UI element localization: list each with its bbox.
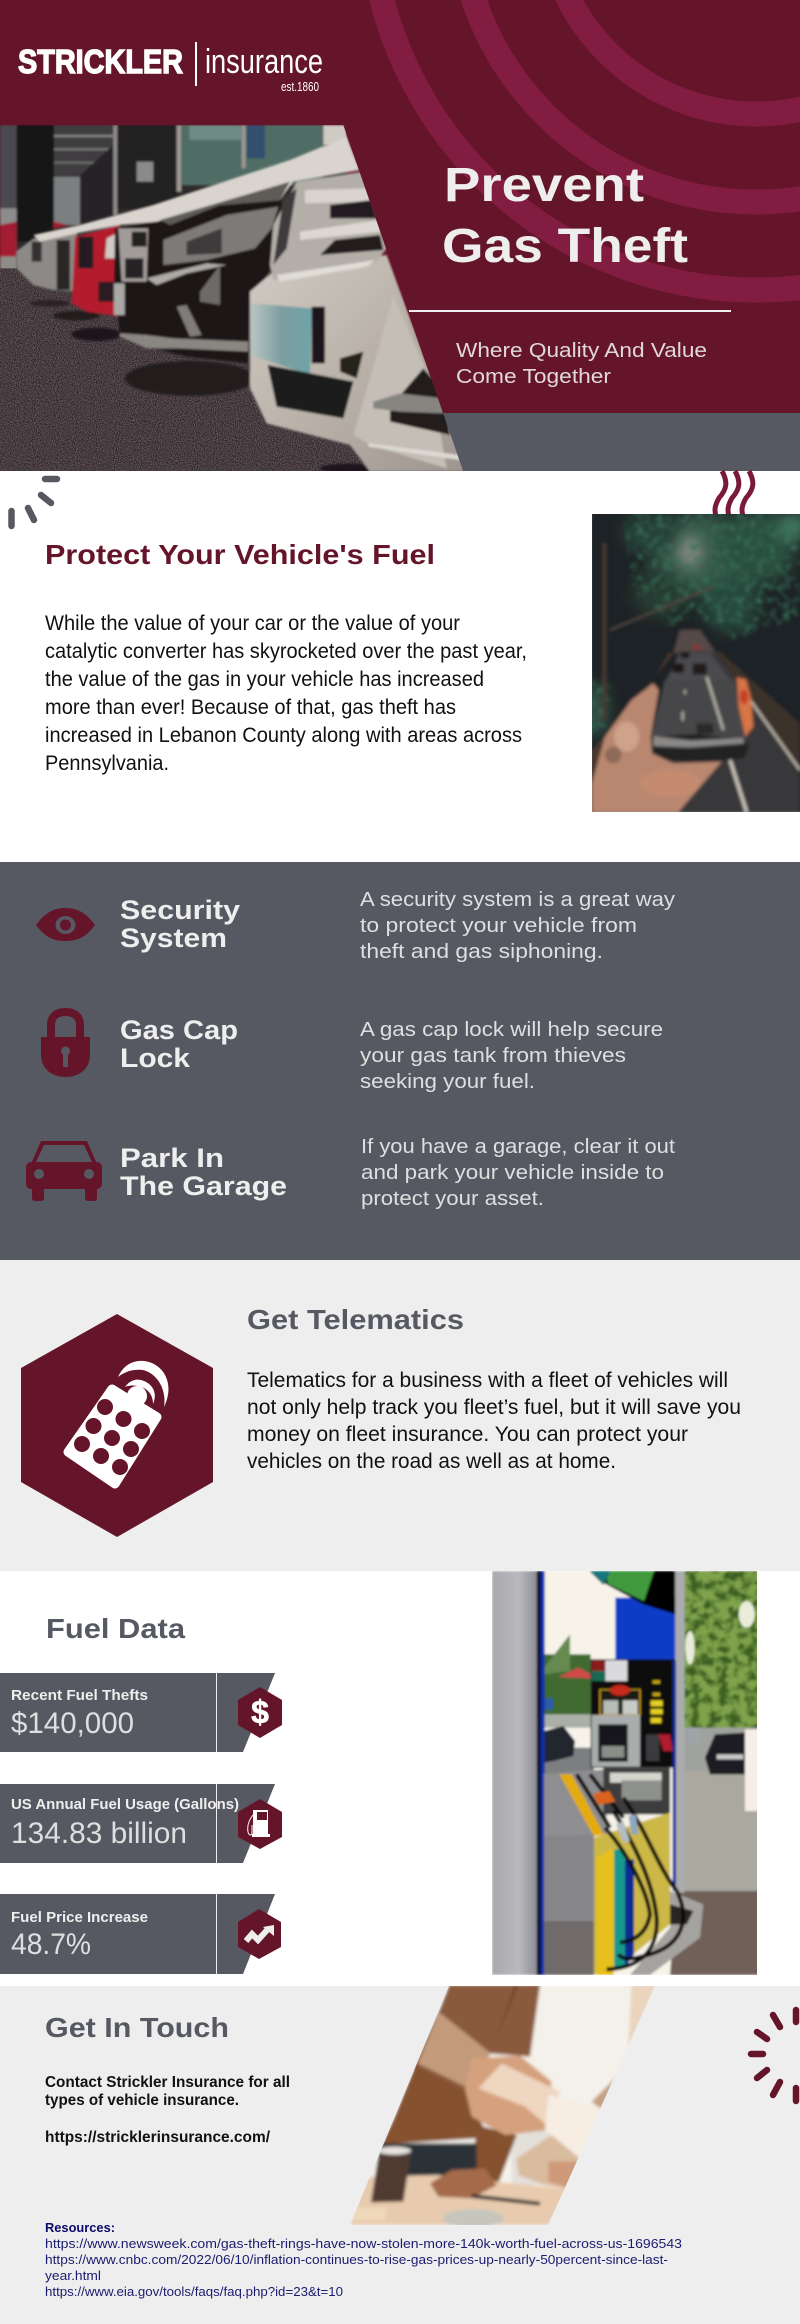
- tip text: gas cap lock: seeking your fuel.: [360, 1071, 535, 1093]
- icon: wavy lines: [715, 471, 753, 516]
- body text: intro paragraph: catalytic converter has skyrocketed over the past year,: [45, 640, 527, 663]
- tip heading: Park In The Garage: Park In: [120, 1143, 224, 1173]
- logo: Strickler Insurance: insurance: [205, 43, 323, 81]
- ground: [0, 268, 467, 472]
- body text: telematics: money on fleet insurance. You can protect your: [247, 1423, 688, 1446]
- logo: Strickler Insurance: [18, 42, 323, 94]
- tip heading: Security System: Security: [120, 895, 240, 925]
- photo: hand holding phone over forest road: [587, 510, 800, 813]
- left background: [542, 1652, 593, 1716]
- icon: rising arrow hexagon: [238, 1909, 281, 1959]
- stat: fuel price increase: 48.7%: [11, 1928, 91, 1961]
- subtitle: tagline: [456, 340, 707, 388]
- photo: gas pump: [490, 1571, 760, 1975]
- body text: telematics: [247, 1369, 741, 1473]
- tip text: park in garage: [361, 1136, 675, 1210]
- resources list: https://www.eia.gov/tools/faqs/faq.php?id=23&t=10: [45, 2284, 343, 2299]
- photo: business handshake: [345, 1985, 662, 2228]
- tip heading: Gas Cap Lock: Gas Cap: [120, 1015, 238, 1045]
- body text: telematics: vehicles on the road as well as at home.: [247, 1450, 616, 1473]
- body text: telematics: not only help track you fleet’s fuel, but it will save you: [247, 1396, 741, 1419]
- rails: [592, 653, 673, 787]
- white car: [250, 255, 467, 472]
- tip text: park in garage: and park your vehicle inside to: [361, 1162, 664, 1184]
- subtitle: tagline: Where Quality And Value: [456, 340, 707, 362]
- logo: Strickler Insurance: est.1860: [281, 79, 319, 94]
- resources list: [45, 2220, 682, 2299]
- title divider: [409, 310, 731, 312]
- contact text: Contact Strickler Insurance for all: [45, 2074, 290, 2091]
- title: Prevent Gas Theft: Prevent: [444, 159, 644, 212]
- tip text: park in garage: If you have a garage, clear it out: [361, 1136, 675, 1158]
- title: Prevent Gas Theft: Gas Theft: [442, 220, 688, 273]
- logo: Strickler Insurance: STRICKLER: [18, 43, 183, 80]
- road: [673, 652, 800, 812]
- resources list: https://www.newsweek.com/gas-theft-rings-have-now-stolen-more-140k-worth-fuel-across-us-1696543: [45, 2236, 682, 2251]
- grey band under title: [430, 413, 800, 471]
- tip heading: Security System: [120, 895, 240, 953]
- black car: [114, 200, 282, 363]
- icon: padlock: [41, 1012, 90, 1077]
- panel: get telematics: [0, 1260, 800, 1571]
- tip text: gas cap lock: A gas cap lock will help secure: [360, 1019, 663, 1041]
- pillars: [675, 1571, 685, 1893]
- decorative concentric rings: [370, 0, 800, 290]
- icon: grey spinner dashes: [12, 479, 57, 526]
- tip heading: Park In The Garage: [120, 1143, 287, 1201]
- tip text: security system: [360, 889, 675, 963]
- tip text: park in garage: protect your asset.: [361, 1188, 544, 1210]
- tip heading: Security System: System: [120, 923, 227, 953]
- stat: fuel price increase: Fuel Price Increase: [11, 1909, 148, 1926]
- icon: dollar hexagon: [238, 1687, 282, 1738]
- contact text: https://stricklerinsurance.com/: [45, 2129, 271, 2146]
- tip text: security system: theft and gas siphoning.: [360, 941, 603, 963]
- hand: [592, 683, 722, 812]
- panel: prevention tips: [0, 862, 800, 1260]
- far cars: [16, 228, 80, 292]
- heading: Protect Your Vehicle's Fuel: Protect Your Vehicle's Fuel: [45, 539, 435, 570]
- stat: US annual fuel usage: 134.83 billion: [11, 1817, 187, 1850]
- resources list: https://www.cnbc.com/2022/06/10/inflation-continues-to-rise-gas-prices-up-nearly-50percent-since-last-: [45, 2252, 668, 2267]
- hood highlight: [33, 137, 360, 242]
- icon: fuel pump hexagon: [238, 1799, 282, 1849]
- tip text: gas cap lock: [360, 1019, 663, 1093]
- stat: recent fuel thefts: $140,000: [11, 1707, 134, 1740]
- contact text: types of vehicle insurance.: [45, 2092, 239, 2109]
- panel: get in touch: [0, 1985, 800, 2324]
- icon: burgundy spinner dashes: [751, 2010, 796, 2101]
- resources list: year.html: [45, 2268, 101, 2283]
- tip heading: Gas Cap Lock: [120, 1015, 238, 1073]
- tip text: security system: A security system is a great way: [360, 889, 675, 911]
- stat: recent fuel thefts: [0, 1673, 282, 1752]
- dispenser: [542, 1774, 596, 1923]
- heading: Fuel Data: Fuel Data: [46, 1613, 185, 1644]
- icon: car: [26, 1141, 102, 1201]
- panel: fuel data: [0, 1571, 800, 1986]
- tip text: security system: to protect your vehicle from: [360, 915, 637, 937]
- stat: US annual fuel usage: [0, 1784, 282, 1863]
- tip text: gas cap lock: your gas tank from thieves: [360, 1045, 626, 1067]
- panel: protect your vehicle's fuel: [0, 470, 800, 812]
- icon: eye: [36, 908, 95, 941]
- trees right: [684, 1571, 759, 1734]
- body text: intro paragraph: increased in Lebanon County along with areas across: [45, 724, 522, 747]
- body text: intro paragraph: Pennsylvania.: [45, 752, 169, 775]
- subtitle: tagline: Come Together: [456, 366, 611, 388]
- title: Prevent Gas Theft: [442, 159, 688, 273]
- resources list: Resources:: [45, 2220, 115, 2235]
- blue panel: [615, 1598, 675, 1661]
- heading: Get Telematics: Get Telematics: [247, 1304, 464, 1335]
- body text: intro paragraph: [45, 612, 527, 775]
- body text: telematics: Telematics for a business with a fleet of vehicles will: [247, 1369, 728, 1392]
- body text: intro paragraph: the value of the gas in your vehicle has increased: [45, 668, 484, 691]
- stat: US annual fuel usage: US Annual Fuel Usage (Gallons): [11, 1796, 239, 1813]
- icon: hexagon with remote key fob: [21, 1314, 213, 1537]
- tip heading: Gas Cap Lock: Lock: [120, 1043, 191, 1073]
- stat: recent fuel thefts: Recent Fuel Thefts: [11, 1687, 148, 1704]
- panel: header banner: [0, 0, 800, 471]
- pump head: [591, 1659, 677, 1768]
- icon: dollar hexagon: $: [251, 1694, 269, 1730]
- photo: row of parked cars: [0, 125, 467, 473]
- heading: Get In Touch: Get In Touch: [45, 2012, 229, 2043]
- tip heading: Park In The Garage: The Garage: [120, 1171, 287, 1201]
- stat: fuel price increase: [0, 1894, 281, 1974]
- contact text: [45, 2074, 290, 2146]
- phone: [651, 734, 749, 763]
- body text: intro paragraph: While the value of your car or the value of your: [45, 612, 460, 635]
- body text: intro paragraph: more than ever! Because of that, gas theft has: [45, 696, 456, 719]
- hoses: [577, 1774, 683, 1969]
